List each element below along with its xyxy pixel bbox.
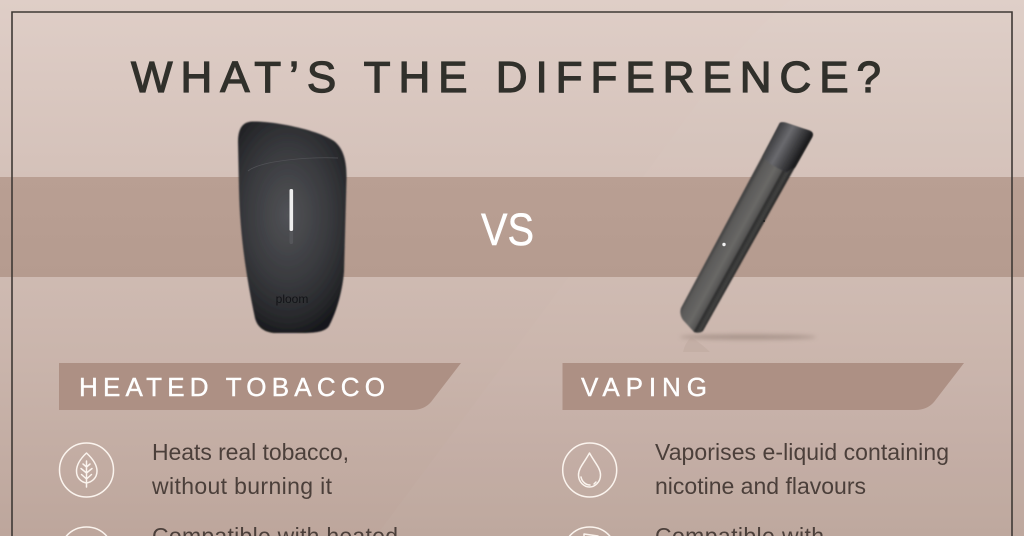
icon: leaf xyxy=(60,443,114,497)
device: heated tobacco: ploom xyxy=(276,292,308,306)
heading banner: vaping xyxy=(562,363,964,410)
text: vaporises e-liquid: nicotine and flavours xyxy=(655,473,866,499)
text: vaporises e-liquid: Vaporises e-liquid containing xyxy=(655,439,949,465)
device: vape pen xyxy=(680,122,816,352)
heading banner: heated tobacco xyxy=(59,363,461,410)
vs label: VS xyxy=(481,204,534,255)
heading banner: heated tobacco: HEATED TOBACCO xyxy=(79,372,385,402)
text: heats real tobacco: Heats real tobacco, xyxy=(152,439,349,465)
heading banner: vaping: VAPING xyxy=(581,372,707,402)
icon: droplet xyxy=(563,443,617,497)
title: WHAT’S THE DIFFERENCE? xyxy=(131,53,881,102)
horizontal band xyxy=(0,177,1024,277)
panel: vaping xyxy=(562,122,964,536)
text: heats real tobacco: without burning it xyxy=(151,473,333,499)
text: vaporises e-liquid xyxy=(655,439,949,499)
text: heats real tobacco xyxy=(151,439,349,499)
icon: second feature circle xyxy=(66,527,107,536)
diagonal light panel xyxy=(376,0,1024,536)
panel: heated tobacco xyxy=(59,121,461,536)
icon: second feature circle with device xyxy=(570,527,610,536)
device: heated tobacco xyxy=(238,121,347,333)
